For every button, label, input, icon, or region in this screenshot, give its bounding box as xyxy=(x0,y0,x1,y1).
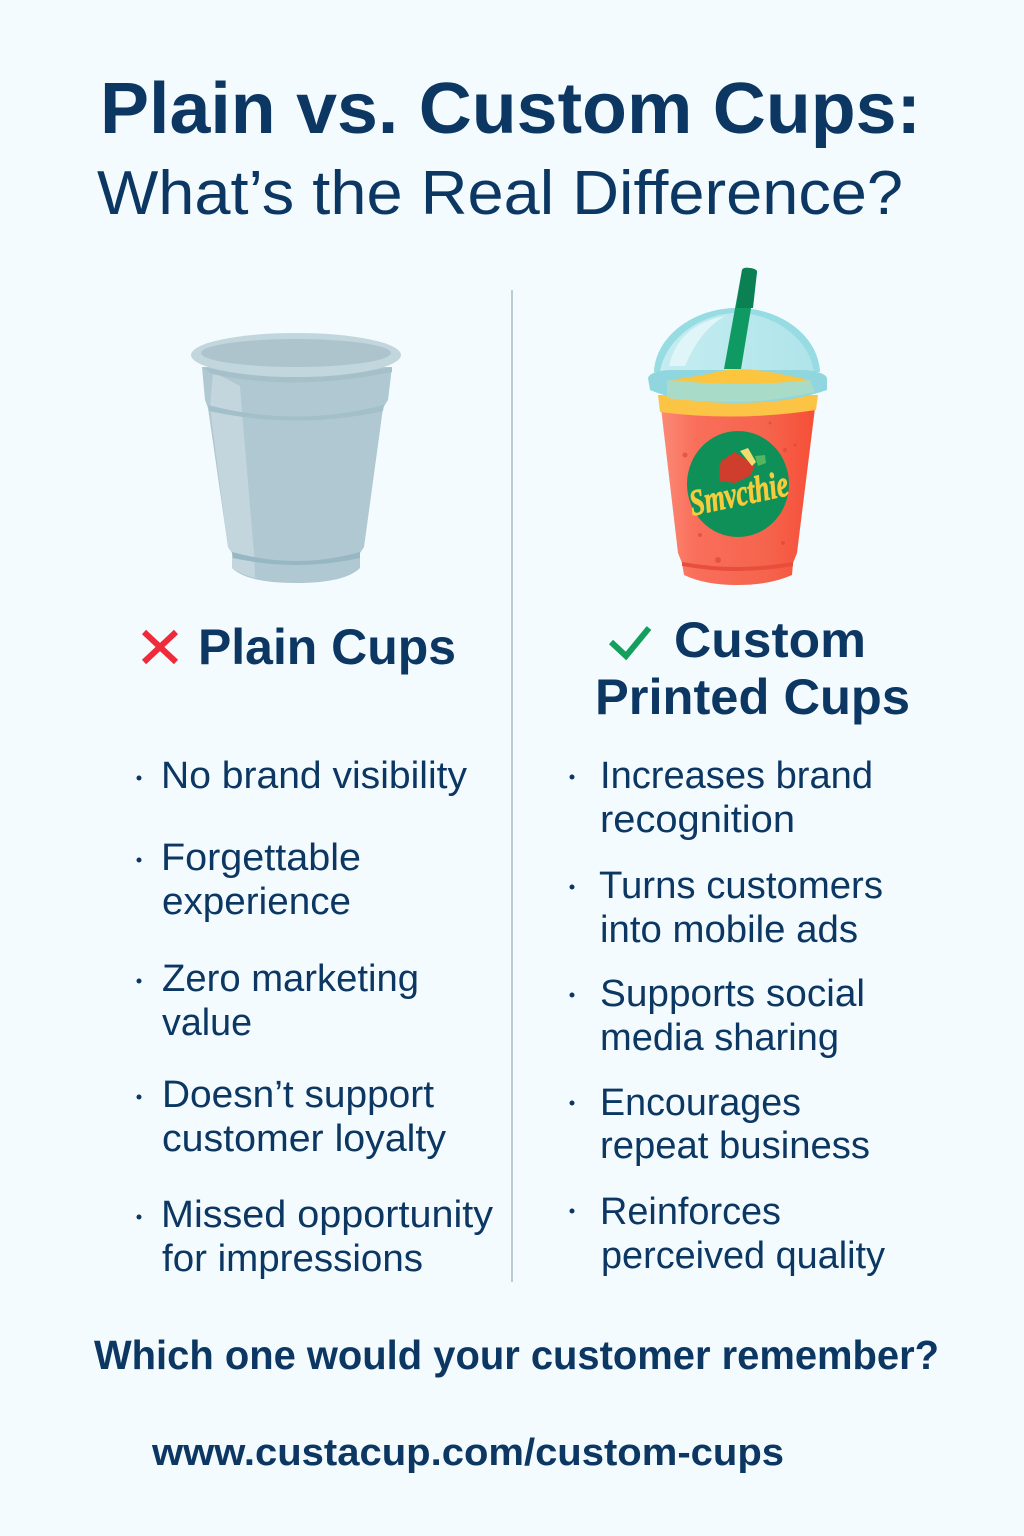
list: plain cups drawbacks: for impressions xyxy=(162,1238,423,1280)
list: plain cups drawbacks: customer loyalty xyxy=(162,1118,446,1160)
heading: custom printed cups xyxy=(595,612,910,725)
list: custom cups benefits: perceived quality xyxy=(601,1235,885,1277)
panel: plain cups xyxy=(136,619,493,1280)
list: custom cups benefits: Supports social xyxy=(600,973,865,1015)
list: plain cups drawbacks xyxy=(136,755,493,1280)
list: plain cups drawbacks: experience xyxy=(162,881,351,923)
list: custom cups benefits xyxy=(570,755,885,1277)
website url: www.custacup.com/custom-cups xyxy=(151,1432,784,1474)
title: What’s the Real Difference? xyxy=(97,159,903,228)
title: Plain vs. Custom Cups: xyxy=(100,69,921,149)
list: plain cups drawbacks: Zero marketing xyxy=(162,958,419,1000)
list: custom cups benefits: Encourages xyxy=(600,1082,801,1124)
list: custom cups benefits: Increases brand xyxy=(600,755,873,797)
heading: custom printed cups: Custom xyxy=(674,612,866,668)
list: custom cups benefits: media sharing xyxy=(600,1017,839,1059)
icon: smoothie cup: Smvcthie xyxy=(686,464,792,525)
list: plain cups drawbacks: Missed opportunity xyxy=(161,1194,493,1236)
icon: red cross xyxy=(144,632,176,662)
list: custom cups benefits: Reinforces xyxy=(600,1191,781,1233)
list: plain cups drawbacks: Doesn’t support xyxy=(162,1074,434,1116)
icon: green check xyxy=(611,628,649,656)
list: plain cups drawbacks: Forgettable xyxy=(161,837,361,879)
icon: plain cup xyxy=(191,333,401,583)
list: custom cups benefits: recognition xyxy=(600,799,795,841)
title xyxy=(97,69,921,228)
list: plain cups drawbacks: value xyxy=(162,1002,252,1044)
list: custom cups benefits: repeat business xyxy=(600,1125,870,1167)
list: custom cups benefits: into mobile ads xyxy=(600,909,858,951)
list: custom cups benefits: Turns customers xyxy=(599,865,883,907)
icon: smoothie cup xyxy=(648,268,827,585)
heading: custom printed cups: Printed Cups xyxy=(595,669,910,725)
list: plain cups drawbacks: No brand visibility xyxy=(161,755,467,797)
heading: plain cups: Plain Cups xyxy=(198,619,456,675)
closing question: Which one would your customer remember? xyxy=(94,1332,939,1378)
panel: custom printed cups xyxy=(570,612,910,1277)
